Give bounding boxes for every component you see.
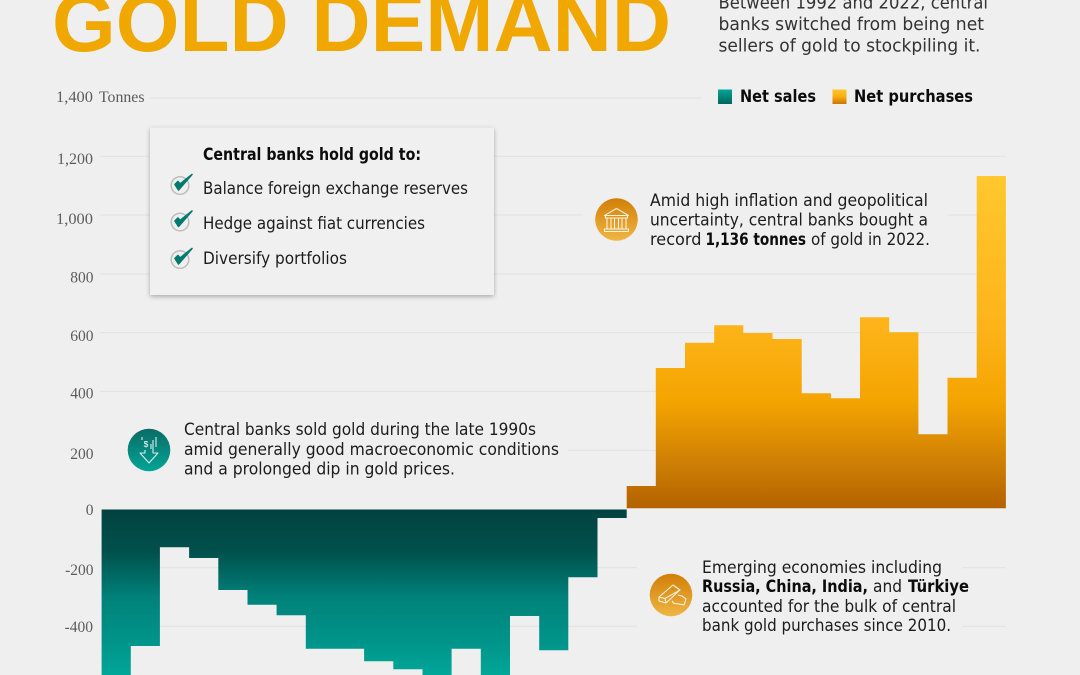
callout: sales in the late 1990s: [184, 420, 559, 478]
y axis labels: 1,400: [56, 89, 93, 106]
y axis labels: 600: [70, 328, 94, 345]
y axis labels: -200: [65, 562, 94, 579]
list item 3: Diversify portfolios: [203, 249, 347, 268]
callout: record purchases in 2022: 1,136 tonnes: [706, 230, 806, 249]
y axis labels: [56, 89, 144, 636]
callout: emerging economies: bank gold purchases since 2010.: [702, 616, 951, 635]
icon: gold bars: [650, 574, 692, 616]
callout: record purchases in 2022: of gold in 2022.: [811, 230, 930, 249]
legend label: net sales: Net sales: [740, 87, 816, 106]
callout: record purchases in 2022: [650, 191, 930, 249]
y axis labels: 1,200: [57, 151, 93, 168]
y axis labels: 800: [70, 270, 94, 286]
legend swatch: net sales: [718, 90, 732, 104]
y axis labels: 1,000: [56, 211, 93, 228]
bar chart: net purchases: [627, 176, 1006, 508]
legend label: net purchases: Net purchases: [854, 87, 973, 106]
callout: emerging economies: Türkiye: [908, 577, 969, 596]
callout: sales in the late 1990s: amid generally good macroeconomic conditions: [184, 440, 559, 459]
intro text: sellers of gold to stockpiling it.: [718, 36, 980, 56]
legend swatch: net purchases: [832, 90, 846, 104]
intro text: banks switched from being net: [718, 15, 984, 35]
list item 1: Balance foreign exchange reserves: [203, 179, 468, 198]
callout: emerging economies: accounted for the bulk of central: [702, 597, 956, 616]
y axis labels: -400: [65, 619, 93, 636]
callout: sales in the late 1990s: Central banks sold gold during the late 1990s: [184, 420, 536, 439]
callout: record purchases in 2022: record: [650, 230, 702, 249]
panel: why central banks hold gold: [150, 128, 494, 295]
callout: emerging economies: Emerging economies including: [702, 558, 942, 577]
y axis labels: 400: [70, 386, 94, 402]
callout: record purchases in 2022: uncertainty, central banks bought a: [650, 210, 928, 230]
y axis labels: Tonnes: [99, 89, 144, 106]
list item 2: Hedge against fiat currencies: [203, 214, 425, 233]
intro text: [718, 0, 988, 56]
y axis labels: 0: [86, 502, 94, 519]
callout: sales in the late 1990s: and a prolonged dip in gold prices.: [184, 460, 455, 478]
callout: emerging economies: and: [873, 577, 902, 596]
callout: emerging economies: [702, 558, 969, 635]
legend: [718, 87, 973, 106]
y axis labels: 200: [70, 446, 94, 463]
check icon 2: [171, 211, 192, 231]
callout: record purchases in 2022: Amid high inflation and geopolitical: [650, 191, 928, 210]
bar chart: net sales: [102, 510, 627, 675]
check icon 3: [171, 248, 192, 268]
icon: falling dollar arrow: $: [144, 439, 149, 449]
check icon 1: [171, 174, 192, 194]
callout: emerging economies: Russia, China, India,: [702, 577, 868, 596]
panel heading: Central banks hold gold to:: [203, 145, 421, 164]
icon: falling dollar arrow: [128, 429, 170, 471]
icon: bank building: [595, 198, 638, 241]
